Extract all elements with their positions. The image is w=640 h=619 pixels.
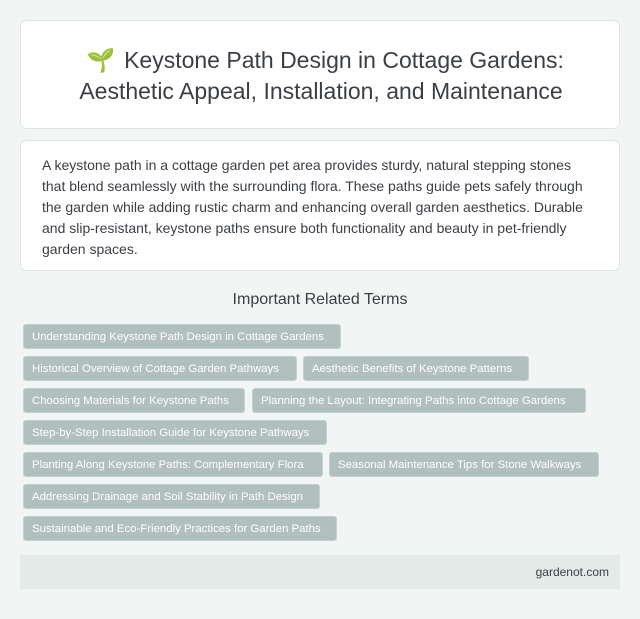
footer text: gardenot.com: [536, 565, 609, 579]
title: Keystone Path Design in Cottage Gardens:: [124, 47, 564, 73]
section heading: Important Related Terms: [233, 291, 407, 308]
tags: Step-by-Step Installation Guide for Keystone Pathways: [32, 427, 309, 439]
footer: [20, 555, 620, 589]
tags: Seasonal Maintenance Tips for Stone Walkways: [338, 459, 581, 471]
tags: Sustainable and Eco-Friendly Practices for Garden Paths: [32, 523, 321, 535]
tags: Historical Overview of Cottage Garden Pathways: [32, 363, 279, 375]
tags: Planting Along Keystone Paths: Complementary Flora: [32, 459, 304, 471]
tags: Addressing Drainage and Soil Stability in Path Design: [32, 491, 303, 503]
title: 🌱: [87, 47, 115, 73]
header card: [20, 20, 620, 129]
tags: Planning the Layout: Integrating Paths into Cottage Gardens: [261, 395, 566, 407]
title: [79, 47, 564, 104]
description text: A keystone path in a cottage garden pet area provides sturdy, natural stepping stones that blend seamlessly with the surrounding flora. These paths guide pets safely through the garden while adding rustic charm and enhancing overall garden aesthetics. Durable and slip-resistant, keystone paths ensure both functionality and beauty in pet-friendly garden spaces.: [42, 157, 583, 257]
tags: Aesthetic Benefits of Keystone Patterns: [312, 363, 512, 375]
title: Aesthetic Appeal, Installation, and Maintenance: [79, 78, 563, 104]
tags: Choosing Materials for Keystone Paths: [32, 395, 229, 407]
description card: [20, 140, 620, 271]
tags: Understanding Keystone Path Design in Cottage Gardens: [32, 331, 324, 343]
